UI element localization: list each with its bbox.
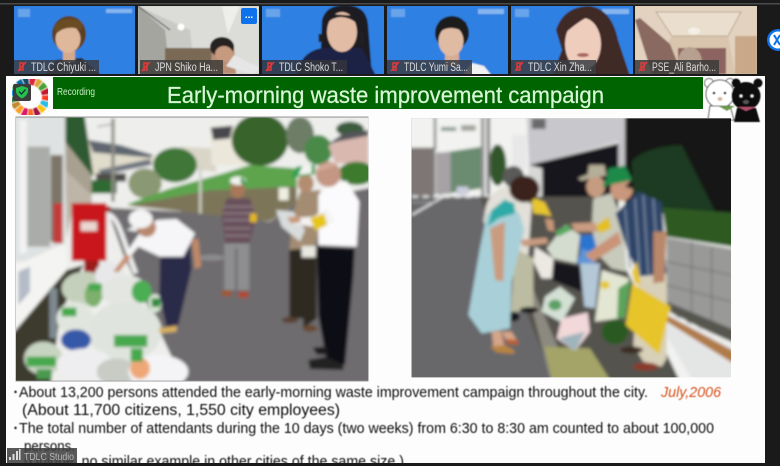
white bear bbox=[704, 78, 735, 120]
video tile: TDLC Yumi Sa: TDLC Yumi Sa... bbox=[404, 62, 468, 74]
video tile: JPN Shiko Ha bbox=[136, 4, 261, 76]
video tile: TDLC Xin Zha: TDLC Xin Zha... bbox=[528, 62, 592, 74]
photo: left street waste inspection bbox=[10, 112, 375, 388]
video tile: PSE_Ali Barho bbox=[633, 4, 759, 77]
yellow sign bbox=[626, 283, 671, 354]
title: Early-morning waste improvement campaign bbox=[167, 82, 604, 108]
man in beige cap bbox=[571, 165, 627, 272]
woman in blue dress bbox=[468, 176, 548, 354]
icon: side scroll button bbox=[767, 29, 780, 51]
video tile: JPN Shiko Ha: JPN Shiko Ha... bbox=[155, 62, 218, 74]
recording label: Recording bbox=[57, 87, 95, 98]
video tile: TDLC Shoko T: TDLC Shoko T... bbox=[279, 62, 343, 74]
background street bbox=[412, 118, 526, 200]
road and sidewalk bbox=[405, 197, 555, 385]
guard rail bbox=[664, 311, 731, 378]
video tile: TDLC Chiyuki: TDLC Chiyuki ... bbox=[31, 62, 96, 74]
man in striped shirt bbox=[222, 176, 257, 298]
video tile: PSE_Ali Barho: PSE_Ali Barho... bbox=[652, 62, 716, 74]
bullet marker 2: · bbox=[14, 421, 18, 437]
left truck and wall bbox=[10, 112, 93, 388]
black bear bbox=[732, 78, 762, 122]
bullet text bbox=[14, 385, 722, 466]
red post box bbox=[72, 203, 110, 273]
bags and yellow sign bbox=[533, 224, 631, 351]
building and hedge bbox=[527, 112, 738, 345]
video tile: JPN Shiko Ha: ... bbox=[245, 10, 253, 21]
presenter label: TDLC Studio bbox=[7, 448, 77, 463]
date: July,2006 bbox=[660, 385, 722, 401]
icon: SDG colour wheel bbox=[14, 81, 46, 113]
icon: bear mascots bbox=[704, 78, 762, 122]
man behind bbox=[483, 166, 554, 321]
photo: right street waste sorting bbox=[405, 112, 738, 385]
road bbox=[107, 187, 375, 388]
presenter label: TDLC Studio: TDLC Studio bbox=[24, 451, 74, 463]
bullet marker 1: · bbox=[14, 385, 18, 401]
man bending over bbox=[113, 210, 201, 333]
man with papers bbox=[276, 164, 325, 332]
icon: security shield bbox=[13, 84, 31, 101]
video tile: TDLC Chiyuki bbox=[12, 4, 137, 76]
man in white shirt bbox=[287, 162, 359, 370]
man in green cap bbox=[585, 166, 667, 371]
bullet line 1 continued: (About 11,700 citizens, 1,550 city employees) bbox=[22, 402, 340, 419]
video tile: TDLC Yumi Sa bbox=[385, 4, 510, 76]
garbage bags bbox=[24, 262, 188, 388]
background houses and trees bbox=[88, 114, 375, 221]
video tile: TDLC Shoko T bbox=[260, 4, 386, 76]
bullet line 1: About 13,200 persons attended the early-morning waste improvement campaign throughout the city. bbox=[19, 385, 648, 401]
heading bar bbox=[53, 77, 703, 109]
bullet line 2: The total number of attendants during the 10 days (two weeks) from 6:30 to 8:30 am counted to about 100,000 bbox=[19, 421, 714, 437]
video tile: TDLC Xin Zha bbox=[509, 4, 635, 76]
bullet line 2 continued: persons. bbox=[24, 439, 75, 455]
